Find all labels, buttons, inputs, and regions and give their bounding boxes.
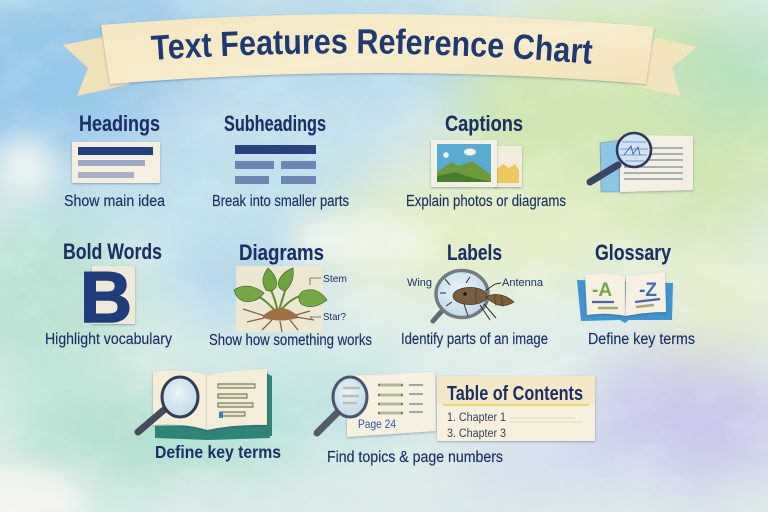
feature: define key terms (138, 369, 281, 462)
caption: Highlight vocabulary (45, 331, 172, 348)
label: wing: Wing (407, 277, 432, 289)
caption: Show how something works (209, 332, 372, 349)
icon: photo with caption card (431, 140, 522, 187)
heading: Labels (447, 240, 502, 265)
entry: chapter 3: 3. Chapter 3 (447, 428, 506, 440)
feature: headings (64, 111, 165, 210)
icon: insect under magnifier (407, 270, 544, 321)
page number: Page 24 (358, 417, 396, 431)
right ribbon tail (625, 38, 697, 96)
label: star: Star? (323, 311, 346, 323)
heading: Captions (445, 111, 523, 136)
icon: bold letter B: B (80, 258, 132, 338)
caption: Find topics & page numbers (327, 449, 503, 466)
caption: Break into smaller parts (212, 193, 349, 210)
heading: Glossary (595, 240, 671, 265)
caption: Define key terms (155, 442, 281, 462)
caption: Explain photos or diagrams (406, 193, 566, 210)
caption: Show main idea (64, 193, 165, 210)
heading: Bold Words (63, 239, 162, 264)
icon: document with heading bars (72, 142, 160, 183)
label: antenna: Antenna (502, 277, 544, 289)
feature: table of contents (317, 372, 595, 466)
feature: bold words (45, 239, 172, 348)
panel heading: Table of Contents (447, 383, 583, 405)
icon: subheading bars (235, 145, 316, 184)
heading: Subheadings (224, 111, 326, 136)
icon: page with magnifier (317, 372, 436, 437)
ribbon body (101, 14, 654, 84)
feature: diagrams (209, 240, 372, 349)
feature: glossary (577, 240, 695, 348)
icon: book with magnifier (590, 133, 693, 192)
feature: labels (401, 240, 548, 348)
heading: Diagrams (239, 240, 324, 265)
icon: open glossary book: -Z (639, 280, 657, 301)
caption: Identify parts of an image (401, 331, 548, 348)
icon: plant diagram (234, 266, 347, 332)
left ribbon tail (63, 37, 130, 96)
entry: chapter 1: 1. Chapter 1 (447, 412, 506, 424)
title banner (63, 14, 697, 96)
panel: table of contents (437, 376, 595, 441)
icon: open glossary book: -A (592, 280, 612, 301)
feature: subheadings (212, 111, 349, 210)
caption: Define key terms (588, 331, 695, 348)
heading: Headings (79, 111, 160, 136)
icon: open book with magnifier (138, 369, 272, 440)
label: stem: Stem (323, 273, 347, 285)
feature: captions (406, 111, 566, 210)
icon: open glossary book (577, 272, 673, 323)
title text: Text Features Reference Chart (150, 28, 592, 64)
